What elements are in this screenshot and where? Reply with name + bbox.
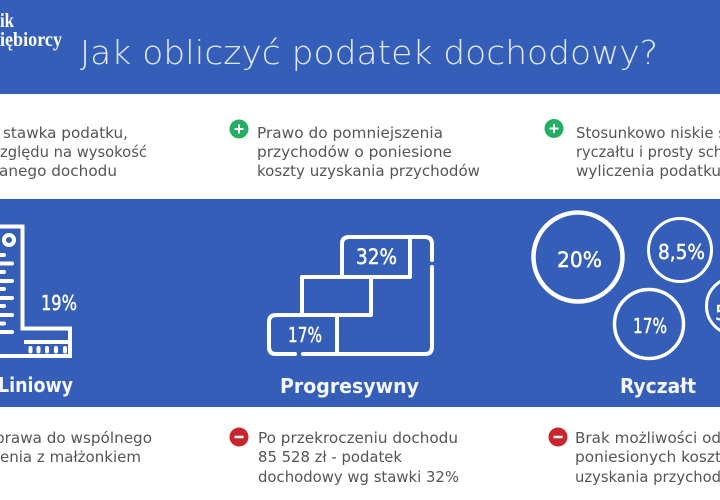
heading: Progresywny: Progresywny bbox=[280, 374, 419, 398]
advantage: flat rate: anego dochodu bbox=[0, 162, 117, 180]
panel: lump sum tax bbox=[534, 212, 720, 398]
advantage: progressive: Prawo do pomniejszenia bbox=[257, 124, 443, 142]
panel: flat tax bbox=[0, 226, 77, 397]
advantage: lump sum bbox=[576, 124, 720, 180]
circle 20% bbox=[534, 212, 622, 302]
icon: minus, lump sum bbox=[548, 428, 568, 446]
advantage: lump sum: wyliczenia podatku bbox=[576, 162, 720, 180]
advantage: progressive: koszty uzyskania przychodów bbox=[257, 162, 480, 180]
logo: iębiorcy bbox=[0, 29, 62, 51]
icon: plus, progressive bbox=[230, 120, 248, 138]
circle 5% bbox=[706, 278, 720, 334]
rate 32%: 32% bbox=[356, 245, 397, 269]
blue band with tax types bbox=[0, 199, 720, 407]
circle 8,5%: 8,5% bbox=[658, 240, 705, 264]
disadvantage: flat rate: enia z małżonkiem bbox=[0, 448, 141, 466]
disadvantage: lump sum: poniesionych koszt bbox=[575, 448, 720, 466]
disadvantage: progressive: Po przekroczeniu dochodu bbox=[258, 429, 458, 447]
circle 8,5% bbox=[648, 218, 712, 282]
disadvantages row bbox=[0, 428, 720, 486]
icon: plus, lump sum bbox=[544, 119, 564, 138]
icon: minus, progressive bbox=[230, 428, 248, 446]
advantage: flat rate: zględu na wysokość bbox=[0, 143, 147, 161]
disadvantage: progressive: 85 528 zł - podatek bbox=[258, 448, 402, 466]
circle 20%: 20% bbox=[557, 248, 602, 273]
advantage: progressive: przychodów o poniesione bbox=[257, 143, 452, 161]
panel: progressive tax bbox=[269, 237, 432, 398]
disadvantage: flat rate bbox=[0, 429, 152, 466]
advantage: flat rate: stawka podatku, bbox=[3, 124, 128, 142]
icon: stairs bbox=[269, 237, 432, 354]
advantages row bbox=[0, 119, 720, 180]
circle 17% bbox=[614, 290, 684, 358]
advantage: progressive bbox=[257, 124, 480, 180]
rate 17%: 17% bbox=[288, 323, 322, 347]
circle 17%: 17% bbox=[633, 314, 667, 338]
advantage: flat rate bbox=[0, 124, 147, 180]
heading: Liniowy: Liniowy bbox=[0, 373, 73, 397]
icon: ruler bbox=[0, 226, 70, 356]
rate 19%: 19% bbox=[41, 291, 77, 315]
disadvantage: progressive bbox=[258, 429, 459, 486]
disadvantage: lump sum: Brak możliwości od bbox=[575, 429, 720, 447]
logo: ik bbox=[0, 10, 15, 32]
header band bbox=[0, 0, 720, 94]
heading: Ryczałt: Ryczałt bbox=[620, 374, 696, 398]
logo bbox=[0, 10, 62, 51]
disadvantage: progressive: dochodowy wg stawki 32% bbox=[258, 468, 459, 486]
disadvantage: lump sum bbox=[575, 429, 720, 486]
disadvantage: lump sum: uzyskania przychod bbox=[575, 468, 720, 486]
title: Jak obliczyć podatek dochodowy? bbox=[80, 33, 658, 72]
